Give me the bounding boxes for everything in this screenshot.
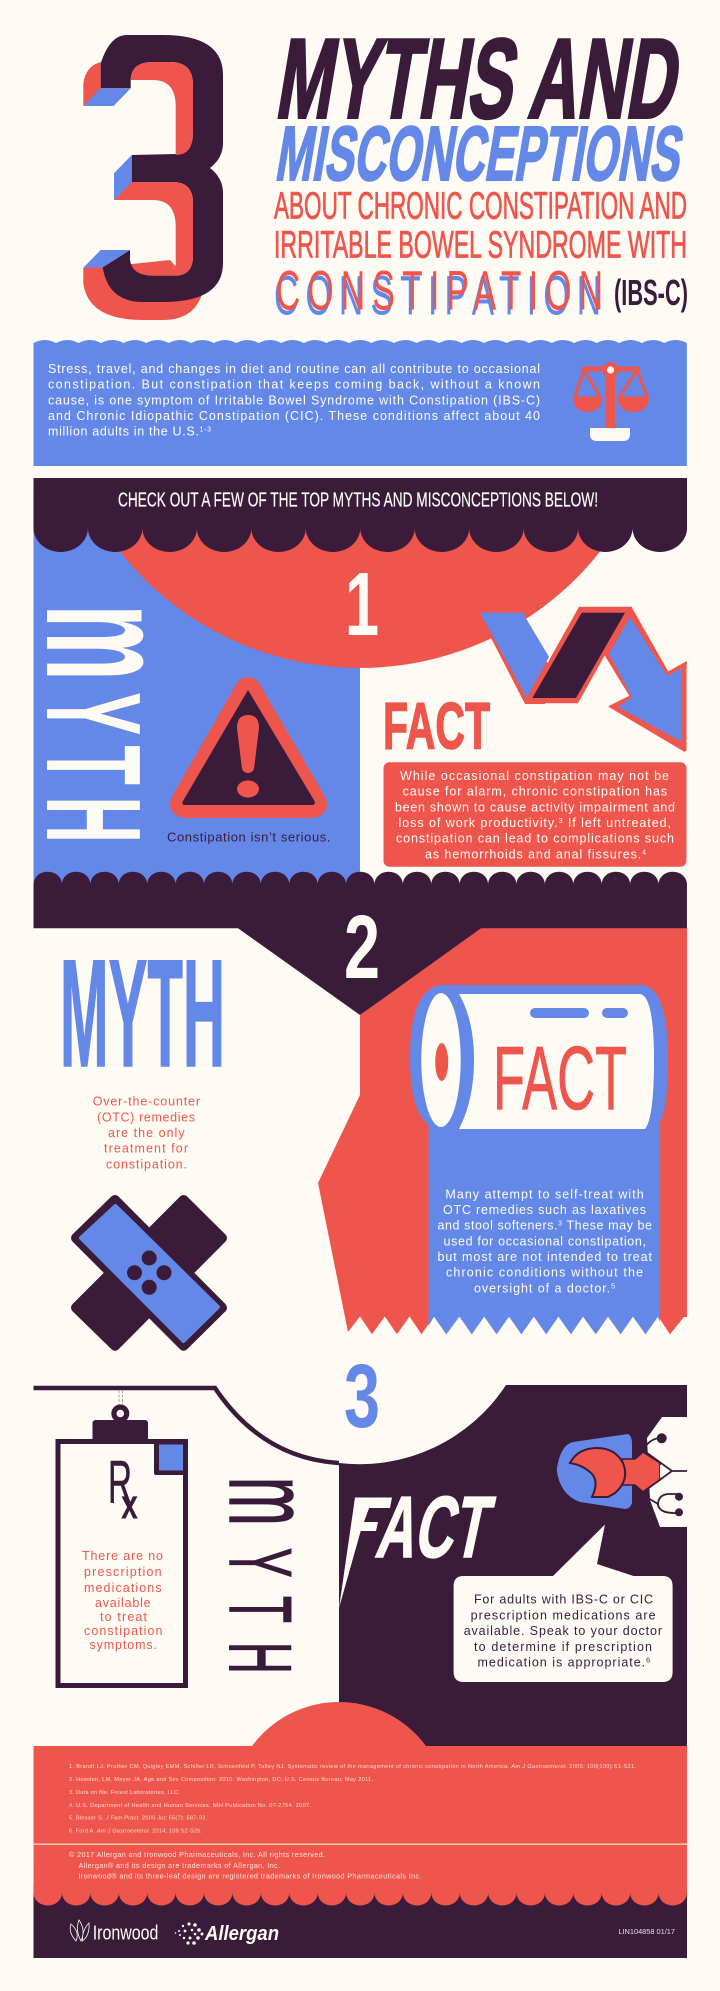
fact 3 text: available. Speak to your doctor	[464, 1624, 662, 1638]
fact 1 text: loss of work productivity.	[398, 816, 558, 830]
icon: scales	[573, 362, 649, 441]
fact 1 text: 3	[559, 818, 563, 825]
fact 1 text: as hemorrhoids and anal fissures.	[425, 847, 641, 861]
rx symbol: x	[121, 1480, 138, 1528]
fact 1 text: If left untreated,	[563, 816, 671, 830]
myth 3 statement: symptoms.	[90, 1638, 157, 1652]
panel: section header banner	[33, 478, 687, 552]
copyright: Allergan® and its design are trademarks of Allergan, Inc.	[78, 1861, 280, 1870]
fact 2 text: 5	[611, 1283, 615, 1290]
fact 2 text: These may be	[563, 1219, 652, 1233]
fact 2 text: and stool softeners.	[438, 1219, 558, 1233]
fact 3 text: medication is appropriate.	[478, 1656, 645, 1670]
fact 3 text: to determine if prescription	[474, 1640, 652, 1654]
intro text: constipation. But constipation that keeps coming back, without a known	[48, 378, 540, 392]
big numeral 3	[83, 35, 223, 320]
rx symbol	[108, 1449, 138, 1528]
myth 2 statement	[93, 1095, 200, 1171]
fact 2 text: but most are not intended to treat	[438, 1250, 653, 1264]
paper sheet	[428, 1120, 660, 1334]
intro text: 1-3	[200, 427, 211, 434]
myth 2 statement: Over-the-counter	[93, 1095, 200, 1109]
myth 3 statement: medications	[84, 1581, 162, 1595]
logo: Allergan	[175, 1922, 279, 1945]
myth 3 statement: There are no	[82, 1549, 163, 1563]
fact 2 text: OTC remedies such as laxatives	[443, 1203, 646, 1217]
myth 1 statement: Constipation isn’t serious.	[167, 830, 330, 845]
myth 3 statement	[82, 1549, 163, 1652]
myth 3 statement: constipation	[84, 1624, 163, 1638]
intro text	[48, 362, 540, 439]
fact 2 text: chronic conditions without the	[446, 1266, 643, 1280]
icon: warning triangle	[170, 677, 327, 818]
fact 1 text: While occasional constipation may not be	[400, 769, 669, 783]
fact 3 text	[464, 1593, 662, 1670]
myth 2 statement: are the only	[108, 1126, 185, 1140]
references: 5. Blesser S. J Fam Pract. 2006 Jul; 55(7): 587-93.	[69, 1816, 207, 1822]
myth 2 statement: (OTC) remedies	[97, 1110, 195, 1124]
text: MYTH	[60, 928, 225, 1099]
icon: doctor	[557, 1417, 687, 1527]
myth 1 rotated heading: m YTH	[9, 604, 209, 843]
icon: clipboard	[58, 1390, 186, 1686]
panel: fact 2 red background	[318, 925, 687, 1334]
myth 2 statement: treatment for	[104, 1142, 188, 1156]
fact 2 text: 3	[558, 1221, 562, 1228]
arc line and hanging rail	[34, 1388, 339, 1463]
icon: bandage	[76, 1200, 222, 1346]
intro text: million adults in the U.S.	[48, 425, 199, 439]
references: 1. Brandt LJ, Prather CM, Quigley EMM, Schiller LR, Schoenfeld P, Talley NJ. Systematic review of the management of chronic constipation in North America. Am J Gastroenterol. 2005; 100(100):S1-S21.	[69, 1764, 636, 1770]
logo: Ironwood: Ironwood	[93, 1922, 158, 1944]
number 2: 2	[344, 898, 380, 998]
references: 2. Howden, LM, Meyer JA. Age and Sex Composition: 2010. Washington, DC: U.S. Census Bureau; May 2011.	[69, 1777, 373, 1783]
fact 3 text: prescription medications are	[471, 1608, 656, 1622]
panel: intro	[34, 340, 687, 466]
fact 2 text: Many attempt to self-treat with	[445, 1187, 644, 1201]
intro text: and Chronic Idiopathic Constipation (CIC). These conditions affect about 40	[48, 409, 540, 423]
myth 3 statement: available	[95, 1596, 151, 1610]
fact 3 text: 6	[646, 1658, 650, 1665]
panel: myth 1 background	[34, 528, 360, 890]
references: 6. Ford A. Am J Gastroenterol. 2014; 109:S2-S26.	[69, 1829, 202, 1835]
logo: Ironwood	[70, 1920, 158, 1944]
panel: footer	[34, 1746, 687, 1958]
myth 2 statement: constipation.	[106, 1157, 187, 1171]
rx symbol: R	[108, 1449, 132, 1516]
fact 1 text: constipation can lead to complications such	[396, 832, 674, 846]
red semicircle	[103, 528, 617, 668]
number 1: 1	[345, 555, 379, 655]
number 3: 3	[344, 1347, 380, 1447]
myth 3 statement: to treat	[100, 1610, 148, 1624]
fact 1 text	[395, 769, 675, 861]
copyright: Ironwood® and its three-leaf design are registered trademarks of Ironwood Pharmaceuticals Inc.	[78, 1872, 422, 1880]
red half circle	[231, 1702, 447, 1918]
fact 2 text: used for occasional constipation,	[444, 1234, 646, 1248]
subtitle: constipation, blue offset layer: CONSTIPATION	[274, 264, 601, 327]
speech bubble	[454, 1524, 673, 1682]
logo: Allergan: Allergan	[204, 1923, 279, 1945]
fact 1 heading: FACT	[383, 688, 490, 762]
myth 3 rotated heading: m YTH	[205, 1477, 336, 1674]
references	[69, 1764, 636, 1835]
panel: fact 3 dark background	[339, 1385, 687, 1746]
icon: toilet roll	[410, 985, 668, 1130]
fact 2 text	[438, 1187, 653, 1295]
copyright: © 2017 Allergan and Ironwood Pharmaceuticals, Inc. All rights reserved.	[69, 1850, 325, 1859]
fact 3 heading with tail: ACT	[370, 1478, 501, 1576]
references: 4. U.S. Department of Health and Human Services. NIH Publication No. 07-2754. 2007.	[69, 1803, 311, 1809]
job code: LIN104858 01/17	[618, 1927, 675, 1936]
panel: band 2	[34, 872, 687, 1015]
references: 3. Data on file. Forest Laboratories, LLC.	[69, 1790, 180, 1796]
icon: zigzag arrow	[478, 607, 686, 751]
fact 1 text: been shown to cause activity impairment and	[395, 800, 675, 814]
intro text: Stress, travel, and changes in diet and routine can all contribute to occasional	[48, 362, 540, 376]
fact 1 box	[384, 762, 686, 867]
myth 3 statement: prescription	[84, 1565, 162, 1579]
subtitle: constipation, red layer: CONSTIPATION	[276, 258, 603, 321]
fact 1 text: 4	[642, 849, 646, 856]
intro text: cause, is one symptom of Irritable Bowel Syndrome with Constipation (IBS-C)	[48, 393, 540, 407]
copyright	[69, 1850, 422, 1880]
fact 2 heading: FACT	[493, 1029, 627, 1129]
fact 3 heading with tail	[339, 1478, 501, 1608]
fact 3 text: For adults with IBS-C or CIC	[474, 1593, 653, 1607]
fact 1 text: cause for alarm, chronic constipation has	[403, 785, 667, 799]
fact 2 text: oversight of a doctor.	[474, 1281, 610, 1295]
